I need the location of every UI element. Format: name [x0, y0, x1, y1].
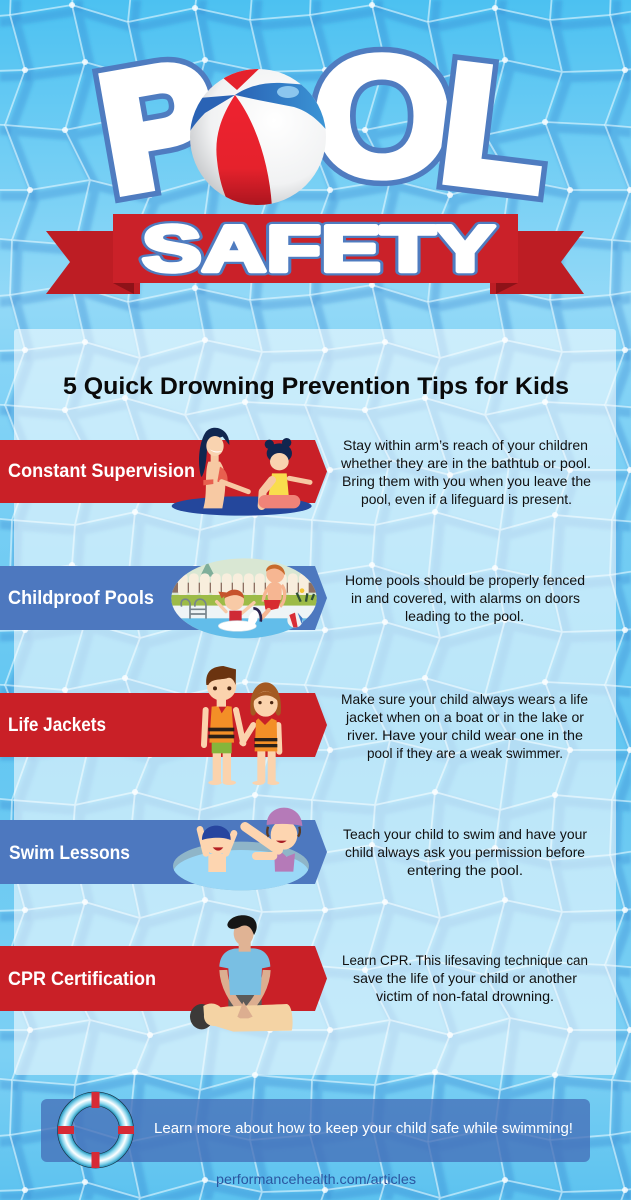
tip text: Stay within arm’s reach of your children	[343, 437, 588, 453]
banner label: Constant Supervision	[8, 461, 195, 482]
ribbon banner	[46, 212, 584, 294]
banner label: Life Jackets	[8, 715, 106, 736]
tip text: pool if they are a weak swimmer.	[367, 745, 563, 761]
call to action text: Learn more about how to keep your child safe while swimming!	[154, 1121, 573, 1137]
banner arrow red	[0, 693, 327, 757]
panel: tips background	[14, 329, 616, 1075]
tip 3: life jackets	[0, 666, 588, 785]
tip text: in and covered, with alarms on doors	[351, 590, 580, 606]
letter L: L	[434, 30, 556, 225]
tip text: Teach your child to swim and have your	[343, 826, 587, 842]
tip text: entering the pool.	[407, 862, 523, 878]
illustration: mother and child in water	[172, 428, 312, 516]
tip text: whether they are in the bathtub or pool.	[340, 455, 591, 471]
tip text	[341, 691, 588, 761]
tip text: jacket when on a boat or in the lake or	[345, 709, 584, 725]
tip text: Bring them with you when you leave the	[342, 473, 591, 489]
tip 1: constant supervision	[0, 428, 591, 516]
illustration: swim teacher and child	[173, 808, 309, 897]
tip text: save the life of your child or another	[353, 970, 577, 986]
heading: Safety: SAFETY	[142, 212, 495, 285]
banner arrow red	[0, 946, 327, 1011]
tip 2: childproof pools	[0, 557, 585, 642]
tip text	[343, 826, 587, 878]
tip text: leading to the pool.	[405, 608, 524, 624]
letter P: P	[88, 26, 228, 226]
tip text: Make sure your child always wears a life	[341, 691, 588, 707]
banner label: Childproof Pools	[8, 588, 154, 609]
letter O: O	[313, 21, 451, 211]
title: Pool	[88, 21, 556, 226]
heading: 5 quick tips: 5 Quick Drowning Prevention Tips for Kids	[63, 373, 569, 400]
banner arrow blue	[0, 820, 327, 884]
tip text: river. Have your child wear one in the	[347, 727, 583, 743]
tip text: Home pools should be properly fenced	[345, 572, 585, 588]
banner label: Swim Lessons	[9, 843, 130, 864]
tip text	[342, 952, 588, 1004]
banner label: CPR Certification	[8, 969, 156, 990]
tip text: Learn CPR. This lifesaving technique can	[342, 952, 588, 968]
letter L: L	[434, 30, 556, 225]
tip text	[340, 437, 591, 507]
tip text: child always ask you permission before	[345, 844, 585, 860]
illustration: two kids in life jackets	[204, 666, 281, 785]
tip 4: swim lessons	[0, 808, 587, 897]
banner arrow blue	[0, 566, 327, 630]
tip text: victim of non-fatal drowning.	[376, 988, 554, 1004]
tip text: pool, even if a lifeguard is present.	[361, 491, 572, 507]
icon: life ring	[57, 1092, 134, 1168]
heading: Safety: SAFETY	[142, 212, 495, 285]
call to action bar	[41, 1099, 590, 1162]
tip 5: cpr certification	[0, 915, 588, 1032]
tip text	[345, 572, 585, 624]
banner arrow red	[0, 440, 327, 503]
url footer: performancehealth.com/articles	[216, 1171, 416, 1187]
illustration: fenced backyard pool	[170, 557, 320, 642]
letter P: P	[88, 26, 228, 226]
icon: beach ball	[190, 69, 326, 205]
illustration: person performing CPR	[190, 915, 293, 1032]
letter O: O	[313, 21, 451, 211]
